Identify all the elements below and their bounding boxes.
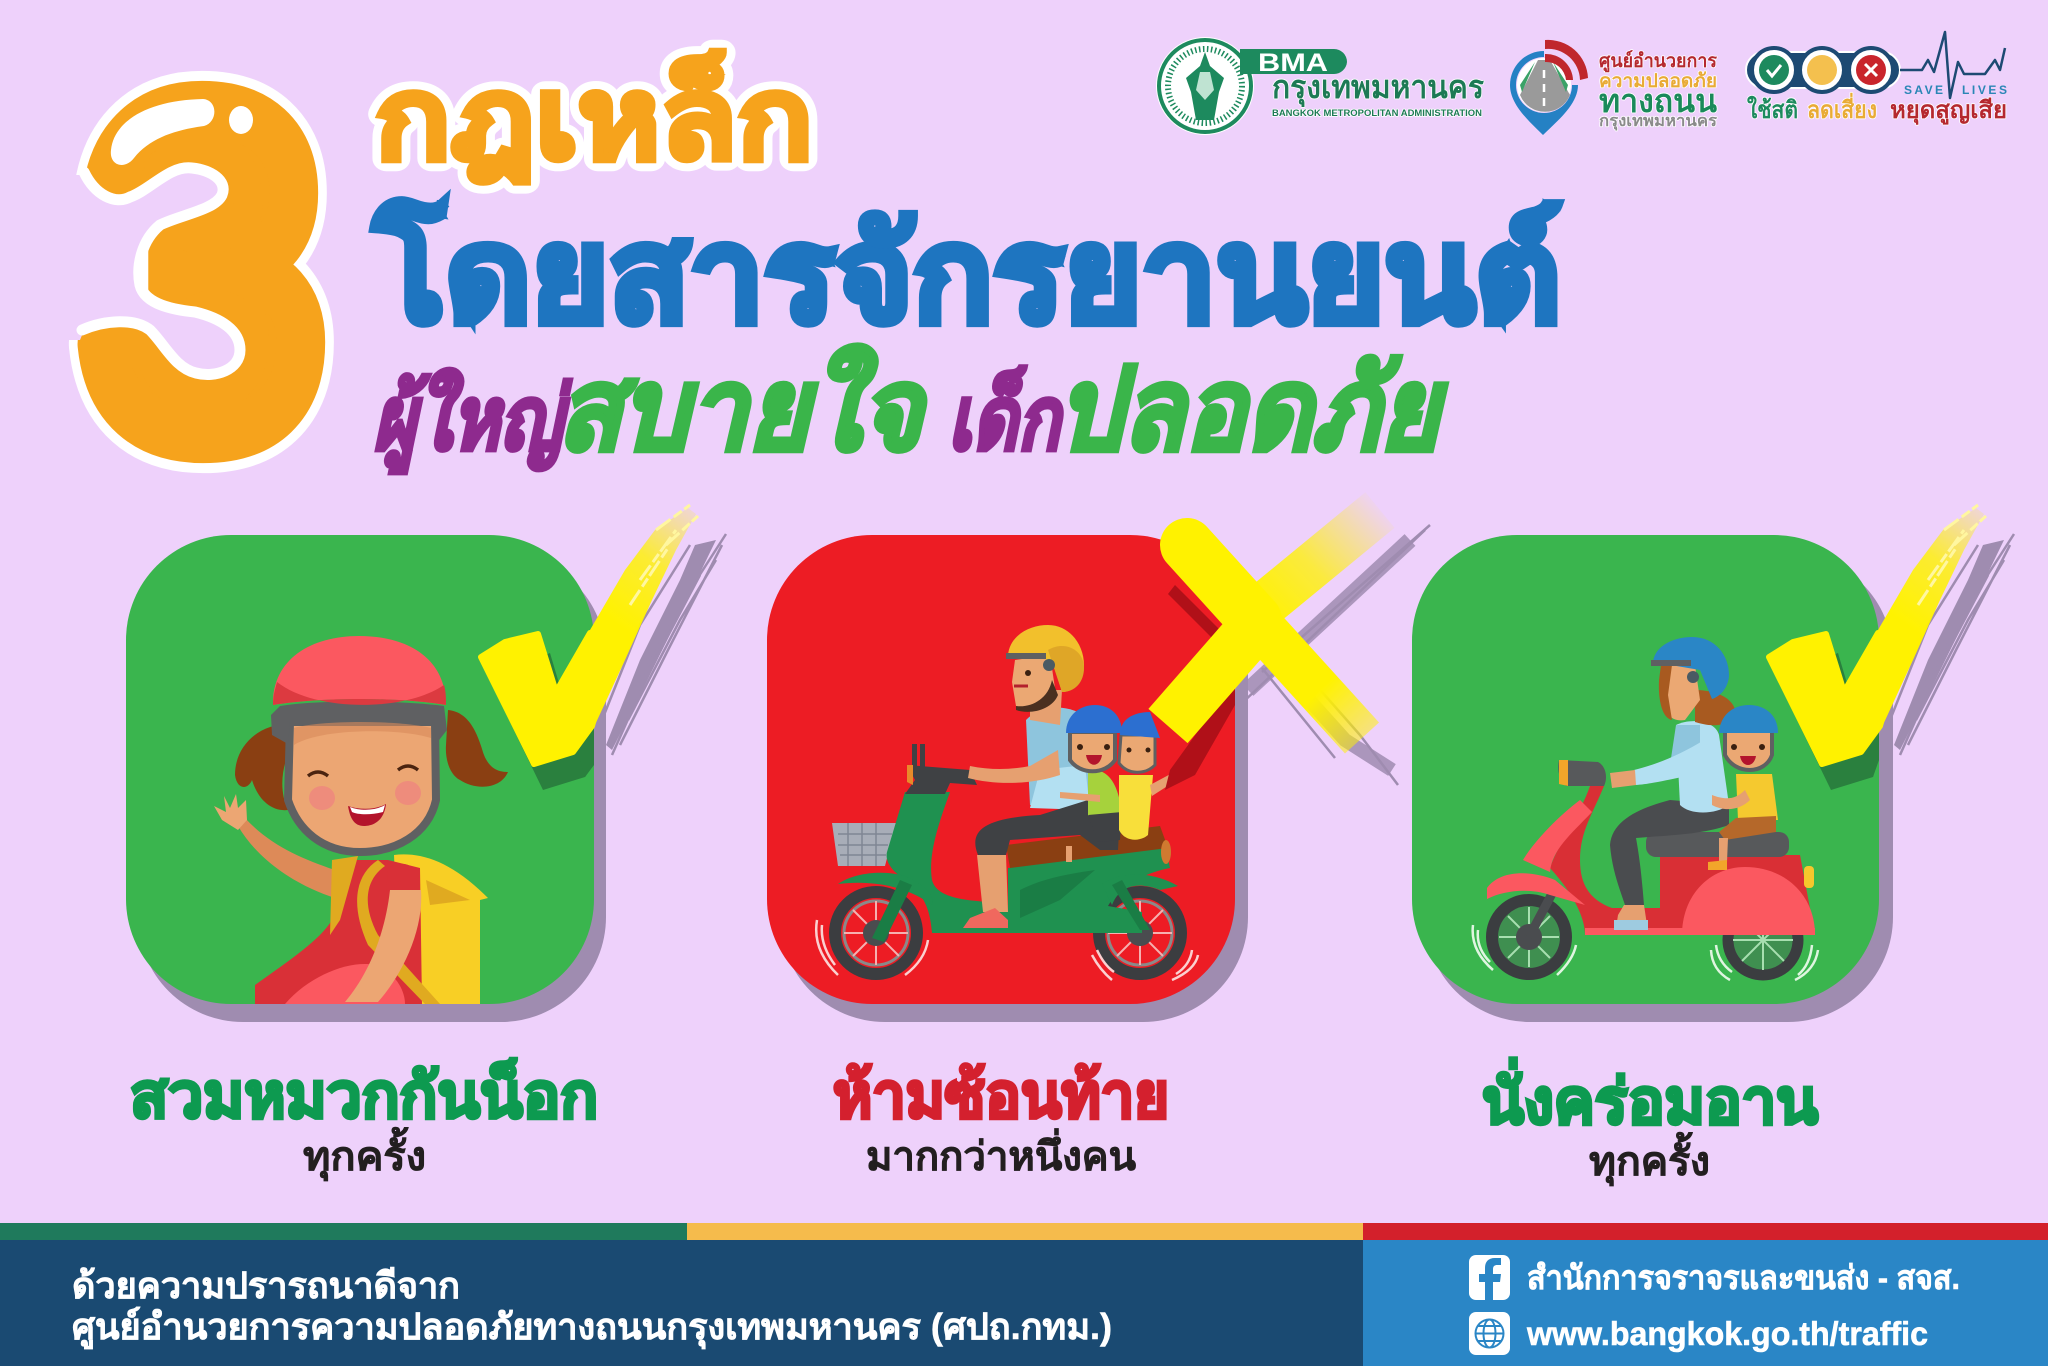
caption: wear helmet: สวมหมวกกันน็อก <box>130 1058 598 1131</box>
logo: road safety centre: กรุงเทพมหานคร <box>1599 113 1717 131</box>
logo: road safety centre <box>1510 40 1718 135</box>
big number 3: 3 <box>93 15 315 528</box>
footer colour stripe <box>0 1223 2048 1240</box>
footer left panel: message: ด้วยความปรารถนาดีจาก <box>72 1265 460 1306</box>
footer right panel: contacts: สำนักการจราจรและขนส่ง - สจส. <box>1527 1259 1960 1296</box>
footer right panel: contacts: www.bangkok.go.th/traffic <box>1526 1315 1928 1352</box>
panel: wear a helmet <box>126 505 726 1182</box>
logo: road safety centre: ความปลอดภัย <box>1599 71 1717 92</box>
logo: BMA Bangkok: กรุงเทพมหานคร <box>1272 69 1484 108</box>
caption: no double riding: มากกว่าหนึ่งคน <box>866 1128 1136 1179</box>
title line 2: โดยสารจักรยานยนต์: โดยสารจักรยานยนต์ <box>372 199 1561 349</box>
illustration: red scooter with mother and child <box>1473 637 1818 980</box>
logo: BMA Bangkok: BMA <box>1258 49 1328 77</box>
illustration: green scooter with man and two children <box>816 625 1198 980</box>
panel: ride astride <box>1412 505 2014 1187</box>
logo: BMA Bangkok <box>1156 37 1484 135</box>
logo: save lives traffic light <box>1746 32 2007 126</box>
logo: BMA Bangkok: BANGKOK METROPOLITAN ADMINISTRATION <box>1272 108 1482 119</box>
caption: no double riding <box>833 1062 1169 1179</box>
title line 3: subtitle: สบายใจ <box>557 344 928 474</box>
footer left panel: message: ศูนย์อำนวยการความปลอดภัยทางถนนกรุงเทพมหานคร (ศปถ.กทม.) <box>72 1306 1112 1350</box>
title line 3: subtitle: เด็ก <box>948 366 1064 468</box>
caption: ride astride: นั่งคร่อมอาน <box>1482 1058 1818 1137</box>
icon: facebook <box>1469 1255 1510 1300</box>
yellow cross mark <box>1165 510 1430 790</box>
footer right panel: contacts <box>1363 1240 2048 1366</box>
yellow check mark <box>1769 505 2014 790</box>
footer left panel: message <box>0 1240 1363 1366</box>
panel 3 background <box>1412 535 1893 1022</box>
logo: save lives traffic light: หยุดสูญเสีย <box>1890 97 2007 126</box>
panel: no more than one passenger <box>767 510 1430 1179</box>
illustration: girl with helmet <box>214 636 508 1004</box>
title line 3: subtitle <box>373 344 1447 474</box>
yellow check mark <box>481 505 726 790</box>
logo: save lives traffic light: LIVES <box>1962 83 2007 97</box>
big number 3: 3 <box>93 15 315 528</box>
panel 2 background <box>767 535 1248 1022</box>
logo: save lives traffic light: ลดเสี่ยง <box>1807 92 1877 124</box>
caption: ride astride <box>1482 1058 1818 1187</box>
title line 1: กฎเหล็ก: กฎเหล็ก <box>375 50 813 183</box>
icon: globe <box>1469 1312 1510 1355</box>
caption: ride astride: ทุกครั้ง <box>1589 1132 1710 1187</box>
title line 1: กฎเหล็ก: กฎเหล็ก <box>375 50 813 183</box>
logo: save lives traffic light: ใช้สติ <box>1747 95 1798 124</box>
caption: wear helmet <box>130 1058 598 1182</box>
logo: road safety centre: ทางถนน <box>1599 83 1717 119</box>
caption: wear helmet: ทุกครั้ง <box>303 1127 426 1182</box>
title line 3: subtitle: ผู้ใหญ่ <box>373 368 572 474</box>
title line 3: subtitle: ปลอดภัย <box>1057 347 1447 474</box>
logo: save lives traffic light: SAVE <box>1904 83 1943 97</box>
panel 1 background <box>126 535 606 1022</box>
logo: road safety centre: ศูนย์อำนวยการ <box>1599 50 1718 73</box>
caption: no double riding: ห้ามซ้อนท้าย <box>833 1062 1169 1131</box>
